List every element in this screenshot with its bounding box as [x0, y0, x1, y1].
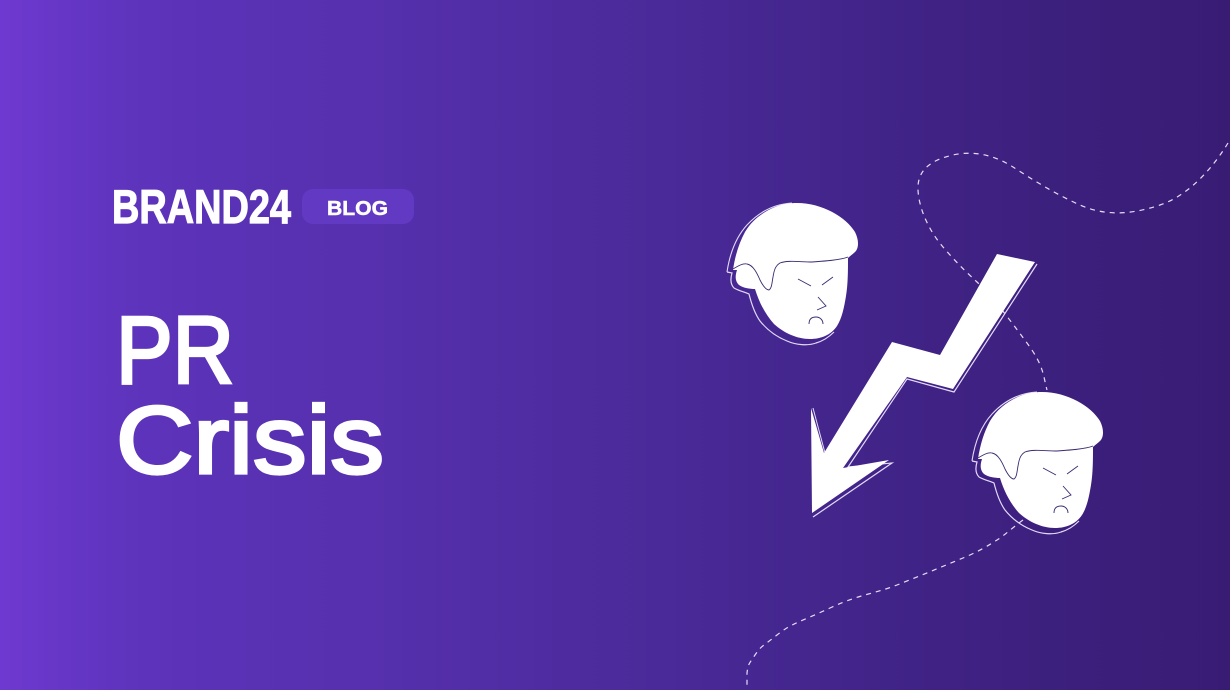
dashed path: upper curve: [918, 143, 1228, 390]
badge: BLOG: [302, 189, 414, 224]
icon: angry face top: [727, 203, 858, 345]
dashed path: lower curve: [747, 520, 1023, 688]
title: PR Crisis: PR: [116, 297, 234, 404]
title: PR Crisis: [116, 297, 384, 494]
title: PR Crisis: Crisis: [116, 387, 384, 494]
icon: falling arrow: [811, 254, 1037, 517]
logo: BRAND24: BRAND24: [112, 180, 291, 233]
badge: BLOG: BLOG: [327, 198, 388, 220]
icon: angry face bottom: [972, 392, 1103, 534]
